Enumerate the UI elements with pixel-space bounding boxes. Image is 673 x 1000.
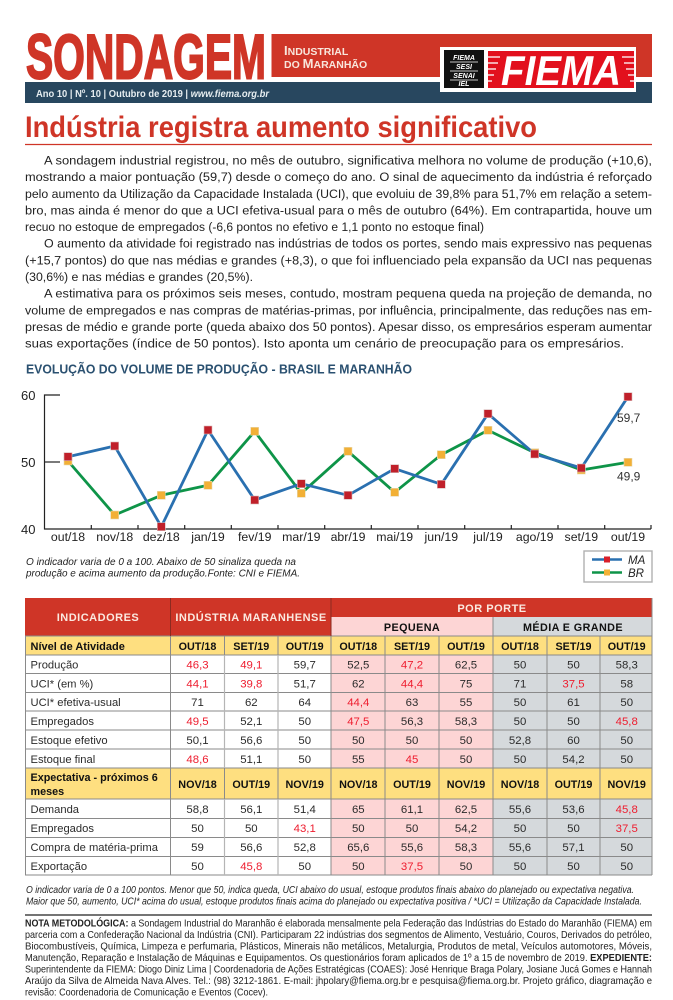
body text: presas de médio e grande porte (queda abaixo dos 50 pontos). Apesar disso, os empresários esperam aumentar (25, 320, 652, 334)
row: exportação: 37,5 (401, 861, 423, 873)
row: estoque efetivo (30, 735, 633, 747)
legend (584, 551, 652, 582)
row: demanda: 51,4 (294, 804, 316, 816)
axes (44, 395, 651, 529)
row: estoque efetivo: 50 (298, 735, 311, 747)
row: UCI: 75 (460, 678, 472, 690)
row: nível de atividade: SET/19 (555, 641, 592, 653)
row: nível de atividade: Nível de Atividade (30, 641, 125, 653)
row: empregados (30, 716, 638, 728)
row: expectativa (30, 772, 646, 798)
row: nível de atividade: OUT/19 (447, 641, 485, 653)
row: empregados expectativa: 50 (352, 823, 365, 835)
value label MA: 59,7 (617, 411, 641, 425)
row: exportação: 50 (191, 861, 204, 873)
row: exportação: 50 (567, 861, 580, 873)
chart note: O indicador varia de 0 a 100. Abaixo de 50 sinaliza queda na (26, 557, 296, 568)
row: estoque efetivo: 50 (620, 735, 633, 747)
row: demanda: 53,6 (562, 804, 585, 816)
row: demanda: Demanda (30, 804, 80, 816)
table footnote (26, 885, 642, 908)
row: compra de matéria-prima: 55,6 (509, 842, 531, 854)
row: UCI: 44,4 (401, 678, 423, 690)
x axis labels: jun/19 (424, 530, 458, 544)
body text: (+15,7 pontos) do que nas médias e grandes (+8,3), o que foi influenciado pela expansão da UCI nas pequenas (25, 253, 652, 267)
row: demanda: 56,1 (240, 804, 262, 816)
x axis labels: jul/19 (472, 530, 503, 544)
row: expectativa: NOV/19 (447, 779, 485, 791)
row: demanda: 61,1 (401, 804, 423, 816)
line chart (21, 388, 651, 544)
row: produção: Produção (30, 660, 78, 672)
row: exportação: 45,8 (240, 861, 262, 873)
chart heading: EVOLUÇÃO DO VOLUME DE PRODUÇÃO - BRASIL E MARANHÃO (26, 362, 412, 376)
row: exportação: Exportação (30, 861, 87, 873)
series: BR (64, 426, 632, 519)
row: estoque final: 50 (298, 754, 311, 766)
row: estoque efetivo: Estoque efetivo (30, 735, 108, 747)
row: estoque final: 51,1 (240, 754, 262, 766)
row: UCI efetiva-usual: 71 (191, 697, 204, 709)
row: exportação: 50 (620, 861, 633, 873)
logo: FIEMA: SESI (456, 64, 473, 71)
row: UCI: UCI* (em %) (30, 678, 94, 690)
row: UCI efetiva-usual: 62 (245, 697, 258, 709)
row: expectativa: Expectativa - próximos 6 (30, 772, 158, 784)
row: expectativa: NOV/19 (285, 779, 324, 791)
row: exportação: 50 (460, 861, 472, 873)
row: expectativa: OUT/19 (555, 779, 592, 791)
row: exportação: 50 (514, 861, 526, 873)
row: compra de matéria-prima: 59 (191, 842, 204, 854)
row: empregados: 47,5 (347, 716, 369, 728)
x axis labels (51, 530, 645, 544)
row: nível de atividade: SET/19 (394, 641, 430, 653)
row: expectativa: NOV/18 (178, 779, 217, 791)
red band (272, 34, 652, 77)
legend: BR (628, 568, 644, 580)
row: estoque final: 54,2 (562, 754, 585, 766)
row: empregados expectativa: 54,2 (455, 823, 477, 835)
masthead subtitle: DO MARANHÃO (284, 56, 367, 71)
body text: volume de empregados e nas compras de matérias-primas, por influência, principalmente, das reduções nas em- (25, 303, 652, 317)
row: nível de atividade: OUT/18 (179, 641, 216, 653)
row: demanda (30, 804, 638, 816)
row: expectativa: NOV/19 (607, 779, 646, 791)
chart note (25, 557, 300, 580)
x axis labels: ago/19 (516, 530, 554, 544)
table backgrounds (25, 598, 652, 875)
row: empregados: 52,1 (240, 716, 262, 728)
body text: suas exportações (índice de 50 pontos). Isto aponta um cenário de preocupação para os empresários. (25, 336, 624, 350)
row: empregados expectativa: 50 (514, 823, 526, 835)
logo: FIEMA: IEL (459, 81, 469, 88)
methodological note (25, 916, 652, 998)
row: compra de matéria-prima: 58,3 (455, 842, 477, 854)
row: empregados: 58,3 (455, 716, 477, 728)
row: empregados expectativa: 50 (191, 823, 204, 835)
x axis labels: jan/19 (190, 530, 225, 544)
row: empregados: 50 (298, 716, 311, 728)
body text: mostrando a maior pontuação (59,7) desde o começo do ano. O sinal de aquecimento da indústria é reforçado (25, 170, 652, 184)
row: UCI: 62 (352, 678, 365, 690)
series: MA (64, 393, 632, 531)
legend: MA (628, 555, 646, 567)
row: compra de matéria-prima: 56,6 (240, 842, 262, 854)
body text: A sondagem industrial registrou, no mês de outubro, significativa melhora no volume de produção (+10,6), (44, 154, 652, 168)
body text: O aumento da atividade foi registrado nas indústrias de todos os portes, sendo mais expressivo nas pequenas (44, 237, 652, 251)
row: empregados: 50 (567, 716, 580, 728)
row: UCI efetiva-usual: 50 (514, 697, 526, 709)
row: exportação: 50 (298, 861, 311, 873)
row: demanda: 62,5 (455, 804, 477, 816)
row: UCI: 39,8 (240, 678, 262, 690)
data table (25, 598, 652, 875)
row: empregados expectativa: 50 (245, 823, 258, 835)
row: compra de matéria-prima: Compra de matéria-prima (30, 842, 159, 854)
masthead: Sondagem: SONDAGEM (26, 22, 266, 92)
table headers: INDÚSTRIA MARANHENSE (175, 611, 327, 624)
x axis labels: out/19 (611, 530, 645, 544)
row: estoque efetivo: 50,1 (186, 735, 209, 747)
row: produção: 49,1 (240, 660, 262, 672)
body text: pelo aumento da Utilização da Capacidade Instalada (UCI), que evoluiu de 39,8% para 51,7% em relação a setem- (25, 187, 652, 201)
body text: bro, mas ainda é menor do que a UCI efetiva-usual para o mês de outubro (64%). Em contrapartida, houve um (25, 203, 652, 217)
x axis labels: nov/18 (96, 530, 133, 544)
body text: recuo no estoque de empregados (-6,6 pontos no efetivo e 1,1 ponto no estoque final) (25, 220, 484, 234)
chart note: produção e acima aumento da produção.Fonte: CNI e FIEMA. (25, 568, 300, 580)
row: compra de matéria-prima (30, 842, 633, 854)
logo: FIEMA: FIEMA (501, 47, 621, 94)
row: nível de atividade (30, 641, 646, 653)
x axis labels: abr/19 (331, 530, 366, 544)
row: demanda: 55,6 (509, 804, 531, 816)
row: expectativa: OUT/19 (393, 779, 431, 791)
row: UCI: 58 (620, 678, 633, 690)
row: UCI: 71 (514, 678, 526, 690)
x axis labels: set/19 (565, 530, 598, 544)
row: UCI efetiva-usual: 44,4 (347, 697, 369, 709)
row: compra de matéria-prima: 65,6 (347, 842, 369, 854)
row: exportação: 50 (352, 861, 365, 873)
row: nível de atividade: SET/19 (233, 641, 269, 653)
row: UCI efetiva-usual: 55 (460, 697, 472, 709)
row: nível de atividade: OUT/18 (501, 641, 539, 653)
row: estoque final (30, 754, 633, 766)
row: estoque efetivo: 50 (352, 735, 365, 747)
y axis labels (21, 388, 35, 537)
table headers: INDICADORES (57, 612, 139, 624)
row: estoque final: 50 (460, 754, 472, 766)
row: empregados: 50 (514, 716, 526, 728)
masthead subtitle (284, 43, 367, 71)
row: estoque final: 45 (406, 754, 418, 766)
row: empregados: 56,3 (401, 716, 423, 728)
row: produção: 46,3 (186, 660, 209, 672)
row: nível de atividade: OUT/18 (339, 641, 377, 653)
x axis labels: fev/19 (238, 530, 272, 544)
row: compra de matéria-prima: 50 (620, 842, 633, 854)
y axis labels: 60 (21, 388, 35, 403)
row: compra de matéria-prima: 57,1 (562, 842, 585, 854)
row: produção: 50 (514, 660, 526, 672)
row: estoque efetivo: 52,8 (509, 735, 531, 747)
row: estoque efetivo: 50 (460, 735, 472, 747)
row: produção (30, 660, 638, 672)
row: empregados expectativa: 43,1 (294, 823, 316, 835)
table headers: MÉDIA E GRANDE (523, 621, 623, 634)
row: exportação (30, 861, 633, 873)
row: demanda: 45,8 (616, 804, 638, 816)
row: estoque final: 50 (620, 754, 633, 766)
row: empregados expectativa: 50 (567, 823, 580, 835)
row: estoque final: 48,6 (186, 754, 209, 766)
row: UCI (30, 678, 633, 690)
row: nível de atividade: OUT/19 (286, 641, 324, 653)
methodological note: Biocombustíveis, Química, Limpeza e perfumaria, Plásticos, Minerais não metálicos, Metalurgia, Produtos de metal, Veículos automotores, Móveis, (25, 942, 652, 952)
row: estoque final: Estoque final (30, 754, 95, 766)
row: empregados: Empregados (30, 716, 94, 728)
value label BR: 49,9 (617, 470, 641, 484)
row: estoque efetivo: 50 (406, 735, 418, 747)
logo: FIEMA (440, 47, 636, 94)
navy issue band (25, 82, 652, 103)
row: UCI: 37,5 (562, 678, 585, 690)
row: produção: 59,7 (294, 660, 316, 672)
row: UCI efetiva-usual: 63 (406, 697, 418, 709)
row: demanda: 58,8 (186, 804, 209, 816)
row: UCI: 51,7 (294, 678, 316, 690)
row: estoque efetivo: 56,6 (240, 735, 262, 747)
row: estoque efetivo: 60 (567, 735, 580, 747)
header banner (25, 22, 652, 103)
row: expectativa: OUT/19 (232, 779, 270, 791)
table headers: PEQUENA (384, 622, 440, 634)
title: Indústria registra aumento significativo (25, 111, 537, 144)
masthead subtitle: INDUSTRIAL (284, 43, 349, 58)
row: produção: 58,3 (616, 660, 638, 672)
issue line: Ano 10 | Nº. 10 | Outubro de 2019 | www.fiema.org.br (36, 89, 270, 100)
row: produção: 47,2 (401, 660, 423, 672)
logo: FIEMA: SENAI (453, 73, 476, 80)
x axis labels: out/18 (51, 530, 85, 544)
row: produção: 62,5 (455, 660, 477, 672)
logo: FIEMA: FIEMA (453, 55, 475, 62)
row: empregados expectativa: Empregados (30, 823, 94, 835)
row: compra de matéria-prima: 52,8 (294, 842, 316, 854)
row: estoque final: 55 (352, 754, 365, 766)
y axis labels: 50 (21, 455, 35, 470)
body text (25, 154, 652, 350)
row: UCI: 44,1 (186, 678, 209, 690)
row: expectativa: NOV/18 (501, 779, 539, 791)
row: UCI efetiva-usual: UCI* efetiva-usual (30, 697, 121, 709)
row: produção: 50 (567, 660, 580, 672)
row: UCI efetiva-usual: 61 (567, 697, 580, 709)
table headers (57, 603, 623, 634)
row: empregados expectativa: 50 (406, 823, 418, 835)
x axis labels: dez/18 (143, 530, 180, 544)
row: UCI efetiva-usual (30, 697, 633, 709)
body text: (30,6%) e nas médias e grandes (20,5%). (25, 270, 253, 284)
row: compra de matéria-prima: 55,6 (401, 842, 423, 854)
row: estoque final: 50 (514, 754, 526, 766)
row: expectativa: meses (30, 786, 64, 798)
row: empregados expectativa: 37,5 (616, 823, 638, 835)
row: empregados expectativa (30, 823, 638, 835)
x axis labels: mar/19 (282, 530, 321, 544)
row: produção: 52,5 (347, 660, 369, 672)
methodological note: Manutenção, Reparação e Instalação de Máquinas e Equipamentos. Os questionários foram aplicados de 1º a 15 de novembro de 2019. EXPEDIENTE: (25, 953, 652, 964)
row: expectativa: NOV/18 (339, 779, 378, 791)
row: nível de atividade: OUT/19 (608, 641, 646, 653)
row: UCI efetiva-usual: 64 (298, 697, 311, 709)
table headers: POR PORTE (457, 603, 527, 615)
methodological note: revisão: Coordenadoria de Comunicação e Eventos (Cocev). (25, 988, 268, 998)
x axis labels: mai/19 (376, 530, 413, 544)
body text: A estimativa para os próximos seis meses, contudo, mostram pequena queda na projeção de demanda, no (44, 287, 652, 301)
row: empregados: 49,5 (186, 716, 209, 728)
y axis labels: 40 (21, 522, 35, 537)
row: empregados: 45,8 (616, 716, 638, 728)
row: demanda: 65 (352, 804, 365, 816)
row: UCI efetiva-usual: 50 (620, 697, 633, 709)
